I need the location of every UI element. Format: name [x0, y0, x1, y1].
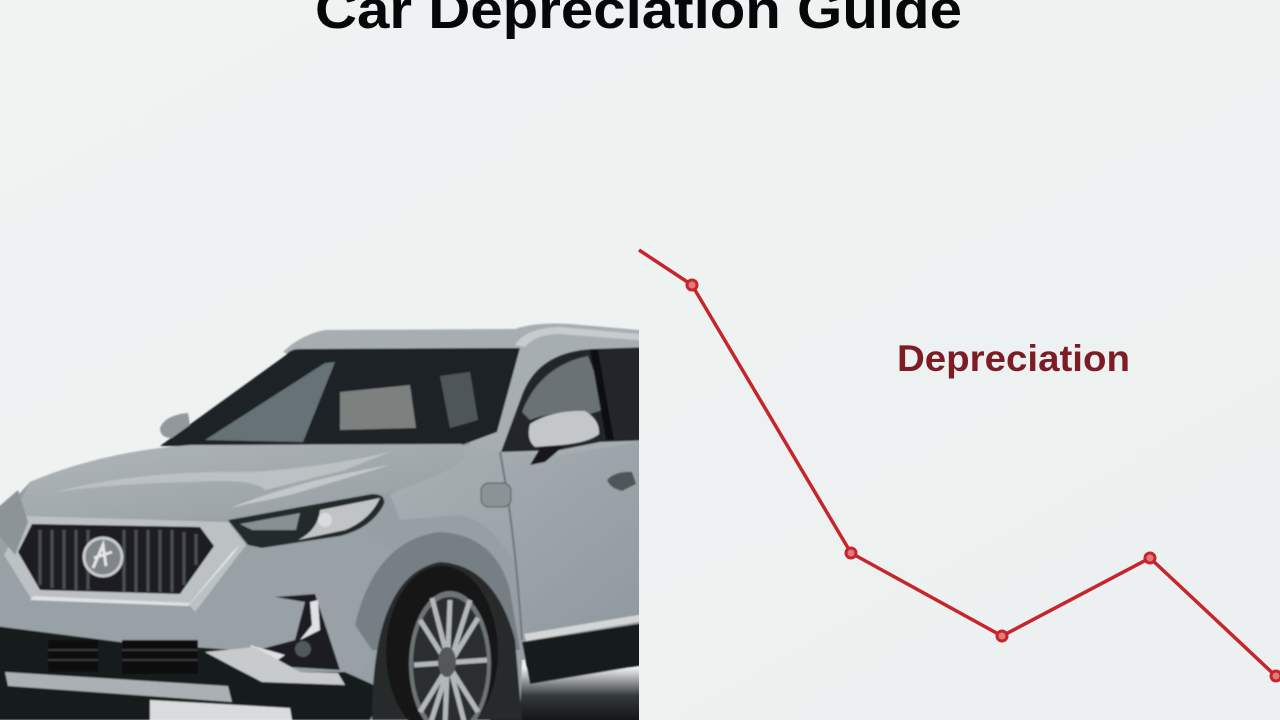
depreciation label: Depreciation [897, 338, 1130, 379]
right headlight [228, 494, 384, 548]
roof and pillars [282, 322, 639, 455]
ground shadow [490, 668, 650, 720]
windshield [160, 348, 520, 447]
front bumper [0, 515, 398, 700]
lower bumper dark band [0, 626, 385, 720]
grille surround [4, 516, 246, 612]
data markers [687, 280, 1280, 681]
far wing mirror [160, 413, 190, 438]
side windows [501, 347, 650, 452]
side sill [522, 613, 650, 684]
wheel arch [372, 562, 522, 720]
roof rail [515, 327, 650, 347]
door seam [500, 452, 522, 640]
depreciation line chart [639, 250, 1280, 681]
silver bumper trim [205, 647, 345, 685]
fuel flap [481, 483, 511, 507]
fender flare [355, 532, 520, 650]
wing mirror [529, 411, 599, 465]
ground under bumper [150, 700, 292, 720]
body base silhouette [0, 430, 650, 720]
door handle [607, 472, 636, 491]
tyre and alloy wheel [386, 566, 498, 720]
hood [16, 444, 466, 520]
left headlight [0, 490, 28, 555]
door panel [390, 442, 639, 525]
radiator grille [18, 524, 214, 594]
lower air intake [48, 640, 198, 674]
badge [84, 538, 122, 576]
skid plate [5, 672, 232, 702]
depreciation trend line [639, 250, 1280, 680]
silver SUV photo panel [0, 324, 650, 720]
bumper crease under grille [30, 545, 240, 606]
fog lamp housing [250, 594, 340, 670]
